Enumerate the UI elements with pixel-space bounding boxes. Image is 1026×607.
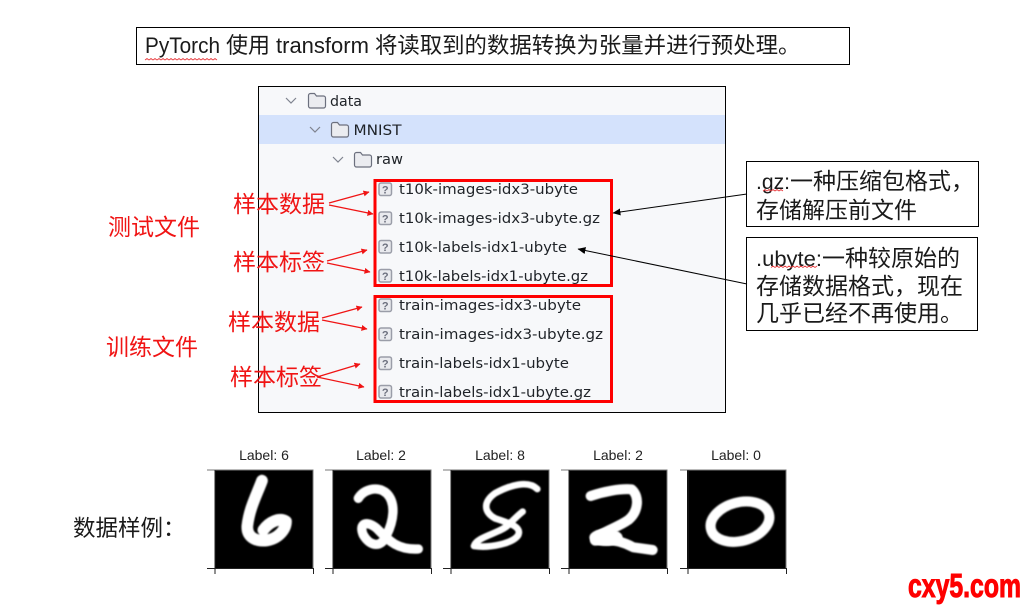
arrows: sample labels, test	[327, 250, 370, 272]
title: 将读取到的数据转换为张量并进行预处理。	[375, 33, 800, 58]
label: sample data, test: 样本数据	[233, 191, 325, 217]
file rows: test files: ?	[382, 214, 389, 226]
file rows: test files: t10k-labels-idx1-ubyte.gz	[399, 269, 588, 285]
callout: ubyte: 几乎已经不再使用。	[756, 300, 963, 326]
file rows: test files: ?	[382, 242, 389, 254]
sample image: digit 0: Label: 0	[711, 447, 761, 463]
callout: ubyte: 存储数据格式，现在	[756, 273, 963, 299]
heading: data samples: 数据样例：	[73, 516, 186, 541]
arrows: sample labels, train	[317, 364, 364, 387]
arrows: sample data, train	[322, 307, 367, 329]
folder row: MNIST	[310, 122, 402, 139]
callout: ubyte: .ubyte:	[756, 248, 822, 271]
file rows: train files: train-images-idx3-ubyte	[399, 298, 581, 314]
red box: test files	[375, 180, 612, 286]
file rows: test files: ?	[382, 271, 389, 283]
callout: ubyte: 一种较原始的	[822, 245, 960, 271]
callout: gz: 一种压缩包格式，	[790, 168, 974, 194]
sample image: digit 2: Label: 2	[356, 447, 406, 463]
title: 使用	[226, 33, 270, 58]
callout: ubyte	[746, 238, 978, 330]
label: sample data, train: 样本数据	[228, 309, 320, 335]
sample image: digit 6: Label: 6	[239, 447, 289, 463]
folder row: MNIST: MNIST	[354, 123, 402, 139]
sample image: digit 2 bold: Label: 2	[593, 447, 643, 463]
file rows: test files: ?	[382, 184, 389, 196]
label: sample labels, train: 样本标签	[230, 364, 322, 390]
red box: train files	[375, 296, 612, 402]
label: train files: 训练文件	[106, 334, 198, 360]
file rows: train files: ?	[382, 387, 389, 399]
file rows: test files: t10k-images-idx3-ubyte	[399, 182, 578, 198]
folder row: data: data	[330, 94, 362, 110]
label: sample labels, test: 样本标签	[233, 249, 325, 275]
file rows: test files: t10k-images-idx3-ubyte.gz	[399, 211, 600, 227]
arrow: ubyte callout to file	[578, 249, 747, 284]
file rows: train files: train-images-idx3-ubyte.gz	[399, 327, 603, 343]
sample image: digit 6	[207, 447, 314, 574]
file rows: train files: ?	[382, 300, 389, 312]
sample image: digit 8	[443, 447, 550, 574]
file rows: test files: t10k-labels-idx1-ubyte	[399, 240, 567, 256]
label: test files: 测试文件	[108, 214, 200, 240]
file rows: train files: train-labels-idx1-ubyte	[399, 356, 569, 372]
callout: gz	[746, 162, 978, 226]
callout: gz: 存储解压前文件	[756, 197, 917, 223]
arrows: sample data, test	[329, 192, 373, 214]
arrow: gz callout to file	[613, 194, 747, 213]
callout: gz: .gz:	[756, 171, 790, 194]
file rows: train files	[379, 298, 603, 401]
file rows: test files	[379, 182, 600, 285]
sample image: digit 2 bold	[561, 447, 668, 574]
panel: file tree	[258, 86, 726, 412]
title: PyTorch	[145, 33, 220, 58]
folder row: raw	[333, 152, 403, 168]
folder row: raw: raw	[376, 152, 403, 168]
sample image: digit 8: Label: 8	[475, 447, 525, 463]
title: transform	[276, 33, 369, 58]
file rows: train files: ?	[382, 330, 389, 342]
file rows: train files: ?	[382, 358, 389, 370]
file rows: train files: train-labels-idx1-ubyte.gz	[399, 385, 591, 401]
title	[136, 28, 850, 64]
folder row: data	[286, 94, 362, 110]
selected row highlight	[259, 115, 725, 144]
sample image: digit 2	[325, 447, 432, 574]
sample image: digit 0	[680, 447, 786, 574]
